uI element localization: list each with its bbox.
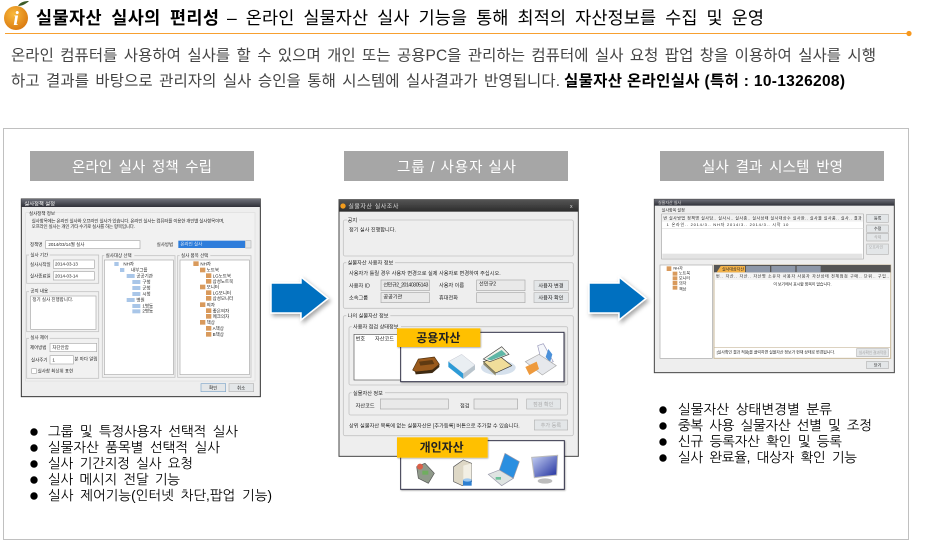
screenshot: asset audit survey window: 공지 (348, 216, 357, 224)
screenshot: audit policy dialog: 실사시작일 (30, 261, 51, 268)
screenshot: audit policy dialog: 시청 (142, 291, 151, 296)
panel: process frame (4, 128, 908, 540)
screenshot: audit policy dialog: 병원 (136, 296, 145, 302)
screenshot: audit policy dialog: A책상 (213, 325, 224, 332)
screenshot: asset audit survey window: 사용자 점검 상태정보 (353, 322, 399, 330)
screenshot: audit result window: 실사확인 결과적용 (859, 349, 887, 355)
screenshot: audit policy dialog: 구청 (142, 279, 151, 285)
icon: fax (413, 357, 439, 374)
screenshot: audit policy dialog: 확인 (209, 384, 217, 391)
screenshot: audit policy dialog: 취소 (237, 384, 245, 391)
screenshot: audit result window: NH자 (673, 265, 683, 271)
screenshot: asset audit survey window: 선민규2_20140305143 (383, 280, 428, 288)
screenshot: audit policy dialog: 오프라인 실사는 개인 기타 수기로 실사를 하는 항목입니다. (32, 223, 135, 230)
screenshot: audit policy dialog: 실사주기 (31, 356, 48, 363)
callout: shared assets: 공용자산 (416, 331, 460, 345)
screenshot: asset audit survey window: 사용자 변경 (538, 281, 564, 289)
callout: personal assets: 개인자산 (420, 441, 464, 455)
screenshot: audit result window: 수정 (874, 225, 882, 231)
screenshot: audit result window: 닫기 (874, 361, 882, 367)
screenshot: asset audit survey window: 사용자가 틀릴 경우 사용자 변경으로 실제 사용자로 변경하여 주십시오. (349, 269, 501, 277)
list: policy features: 실사 기간지정 실사 요청 (48, 456, 193, 471)
screenshot: audit result window: 번 실사방법 정책명 실사담.. 실사시.. 실사종.. 실사상태 실사대상수 실사완.. 실사율 실사품.. 실사.. 결과 (663, 214, 862, 220)
screenshot: audit policy dialog: 메크의자 (213, 313, 229, 320)
arrow: middle to right (589, 277, 646, 320)
screenshot: audit policy dialog: 실사 제어 (30, 334, 48, 341)
icon: laptop (488, 453, 519, 486)
icon: server (454, 460, 472, 486)
screenshot: audit policy dialog: 실사창 최상위 표현 (38, 368, 73, 375)
screenshot: asset audit survey window: 사용자 확인 (538, 294, 564, 302)
heading: policy setup (30, 151, 254, 181)
screenshot: asset audit survey window: 실물자산 사용자 정보 (348, 258, 393, 266)
heading: policy setup: 온라인 실사 정책 수립 (72, 159, 212, 176)
screenshot: audit policy dialog: 실사방법 (157, 241, 173, 248)
list: policy features: 실사 제어기능(인터넷 차단,팝업 기능) (48, 488, 272, 503)
screenshot: audit policy dialog: 실사항목에는 온라인 실사와 오프라인 실사가 있습니다. 온라인 실사는 컴퓨터를 이용한 개인별 실사항목이며, (32, 218, 224, 225)
screenshot: asset audit survey window: 사용자 ID (349, 281, 370, 289)
screenshot: asset audit survey window: 추가 등록 (541, 421, 561, 429)
screenshot: asset audit survey window: 공공기관 (383, 293, 403, 301)
screenshot: audit result window: 등록 (874, 215, 882, 221)
icon: phone terminal (417, 463, 434, 483)
screenshot: asset audit survey window: 번호 (356, 335, 365, 343)
screenshot: audit policy dialog: 실사정책 설정 (24, 200, 55, 208)
intro text block (11, 46, 876, 90)
screenshot: asset audit survey window: 상위 실물자산 목록에 없는 실물자산은 [추가등록] 버튼으로 추가할 수 있습니다. (349, 422, 520, 430)
screenshot: asset audit survey window: 나의 실물자산 정보 (348, 312, 389, 320)
screenshot: asset audit survey window: 자산코드 (356, 401, 375, 409)
list: result features: 중복 사용 실물자산 선별 및 조정 (678, 418, 872, 433)
screenshot: audit policy dialog: 군청 (142, 285, 151, 290)
title: – 온라인 실물자산 실사 기능을 통해 최적의 자산정보를 수집 및 운영 (227, 8, 764, 28)
heading: result reflected: 실사 결과 시스템 반영 (702, 159, 843, 176)
screenshot: audit policy dialog: 삼성모니터 (213, 295, 233, 302)
screenshot: audit result window: 실물자산 실사 (658, 199, 681, 205)
screenshot: audit result window: 삭제 (874, 234, 882, 240)
screenshot: audit result window: 번.. 자산.. 자산.. 자산명 소유자 사용자 사용자 자산상태 전체점검 구매.. 단위.. 구입.. (716, 273, 889, 279)
screenshot: asset audit survey window: x (570, 204, 573, 210)
screenshot: asset audit survey window: 점검 (460, 402, 470, 409)
screenshot: audit result window: 이 보기에서 표시할 항목이 없습니다. (773, 281, 832, 287)
screenshot: audit policy dialog: 온라인 실사 (180, 241, 202, 248)
screenshot: asset audit survey window: 선민규2 (479, 280, 496, 288)
screenshot: audit result window: 실사항목 설정 (662, 207, 685, 213)
screenshot: audit result window: [실사확인 결과 적용]을 클릭하면 실물자산 정보가 현재 상태로 변경됩니다. (717, 349, 835, 355)
screenshot: audit policy dialog: 공지 내용 (30, 288, 48, 295)
screenshot: audit policy dialog: 책상 (207, 319, 215, 326)
screenshot: audit policy dialog: 모니터 (207, 284, 219, 291)
screenshot: audit policy dialog (21, 199, 260, 397)
screenshot: audit policy dialog: 제어방법 (30, 344, 47, 351)
screenshot: audit result window: 노트북 (679, 270, 690, 275)
screenshot: audit policy dialog: 내부그룹 (131, 266, 148, 273)
screenshot: audit result window: 오프라인 (869, 243, 884, 249)
screenshot: audit policy dialog: 분 마다 알림 (74, 356, 97, 363)
icon: printer (525, 344, 556, 375)
screenshot: audit policy dialog: NH자 (200, 260, 211, 267)
title: 실물자산 실사의 편리성 (36, 8, 219, 28)
screenshot: audit policy dialog: 1병동 (142, 302, 153, 308)
callout: personal assets (397, 437, 564, 489)
screenshot: audit policy dialog: LG노트북 (213, 273, 231, 279)
heading: group and user audit: 그룹 / 사용자 실사 (397, 159, 516, 176)
screenshot: audit policy dialog: 실사 품목 선택 (181, 252, 208, 259)
list: policy features: 실물자산 품목별 선택적 실사 (48, 440, 220, 455)
screenshot: audit result window: 모니터 (679, 275, 690, 281)
screenshot: asset audit survey window: 점검 확인 (533, 400, 554, 408)
screenshot: audit policy dialog: 2014/03/14월 실사 (48, 241, 84, 248)
heading: group and user audit (344, 151, 568, 181)
screenshot: audit policy dialog: 1 (52, 357, 55, 362)
arrow: left to middle (271, 277, 328, 320)
list: policy features: 그룹 및 특정사용자 선택적 실사 (48, 424, 238, 439)
screenshot: audit policy dialog: 2014-03-14 (55, 273, 78, 278)
screenshot: audit policy dialog: 공공기관 (136, 272, 153, 279)
screenshot: audit policy dialog: NH자 (123, 260, 134, 267)
screenshot: asset audit survey window: 사용자 이름 (439, 281, 464, 289)
screenshot: audit policy dialog: 차단안함 (52, 344, 69, 351)
intro text block: 온라인 컴퓨터를 사용하여 실사를 할 수 있으며 개인 또는 공용PC을 관리하는 컴퓨터에 실사 요청 팝업 창을 이용하여 실사를 시행 (11, 46, 876, 64)
screenshot: audit policy dialog: 실사정책 정보 (29, 210, 55, 217)
intro text block: 실물자산 온라인실사 (특허 : 10-1326208) (564, 72, 845, 90)
screenshot: audit policy dialog: 정기 실사 진행합니다. (32, 296, 73, 303)
screenshot: audit policy dialog: 의자 (207, 301, 215, 308)
screenshot: audit policy dialog: 실사종료일 (30, 272, 51, 279)
screenshot: asset audit survey window: 자산코드 (375, 335, 394, 343)
screenshot: audit policy dialog: LG모니터 (213, 289, 231, 296)
screenshot: asset audit survey window: 휴대전화 (439, 294, 458, 302)
screenshot: asset audit survey window (339, 200, 578, 489)
screenshot: audit result window: 의자 (679, 280, 687, 286)
screenshot: audit policy dialog: 좋은의자 (213, 307, 229, 314)
screenshot: asset audit survey window: 소속그룹 (349, 294, 368, 302)
screenshot: audit policy dialog: 2병동 (142, 308, 153, 314)
screenshot: audit policy dialog: 노트북 (207, 268, 219, 274)
icon: orange info logo (4, 1, 29, 30)
list: result features: 실물자산 상태변경별 분류 (678, 402, 832, 417)
list: result features: 실사 완료율, 대상자 확인 기능 (678, 450, 857, 465)
title rule with dot (5, 31, 912, 36)
list: policy features (30, 424, 272, 503)
intro text block: 하고 결과를 바탕으로 관리자의 실사 승인을 통해 시스템에 실사결과가 반영됩니다. (11, 72, 560, 90)
screenshot: audit result window: 1 온라인.. 2014/3.. NH자 2014/3.. 2014/3.. 시작 10 (667, 221, 789, 227)
screenshot: asset audit survey window: 실물자산 정보 (353, 389, 383, 397)
screenshot: audit policy dialog: 2014-03-13 (55, 262, 78, 267)
screenshot: asset audit survey window: 정기 실사 진행합니다. (349, 226, 396, 234)
screenshot: audit result window (654, 199, 894, 373)
icon: monitor (532, 455, 558, 484)
screenshot: audit result window: 책상 (679, 285, 687, 291)
screenshot: audit policy dialog: 실사대상 선택 (106, 252, 132, 259)
heading: result reflected (660, 151, 884, 181)
screenshot: asset audit survey window: 실물자산 실사조사 (348, 203, 399, 211)
list: result features (659, 402, 872, 465)
callout: shared assets (397, 328, 564, 382)
screenshot: audit policy dialog: 정책명 (30, 241, 42, 248)
icon: scanner (481, 347, 516, 376)
screenshot: audit policy dialog: 삼성노트북 (213, 278, 233, 285)
screenshot: audit policy dialog: 실사 기간 (30, 251, 48, 258)
screenshot: audit result window: 실사대상자산 (722, 265, 744, 271)
icon: orange info logo: i (13, 8, 19, 30)
list: policy features: 실사 메시지 전달 기능 (48, 472, 180, 487)
list: result features: 신규 등록자산 확인 및 등록 (678, 434, 842, 449)
icon: router (448, 354, 475, 379)
screenshot: audit policy dialog: B책상 (213, 331, 224, 338)
